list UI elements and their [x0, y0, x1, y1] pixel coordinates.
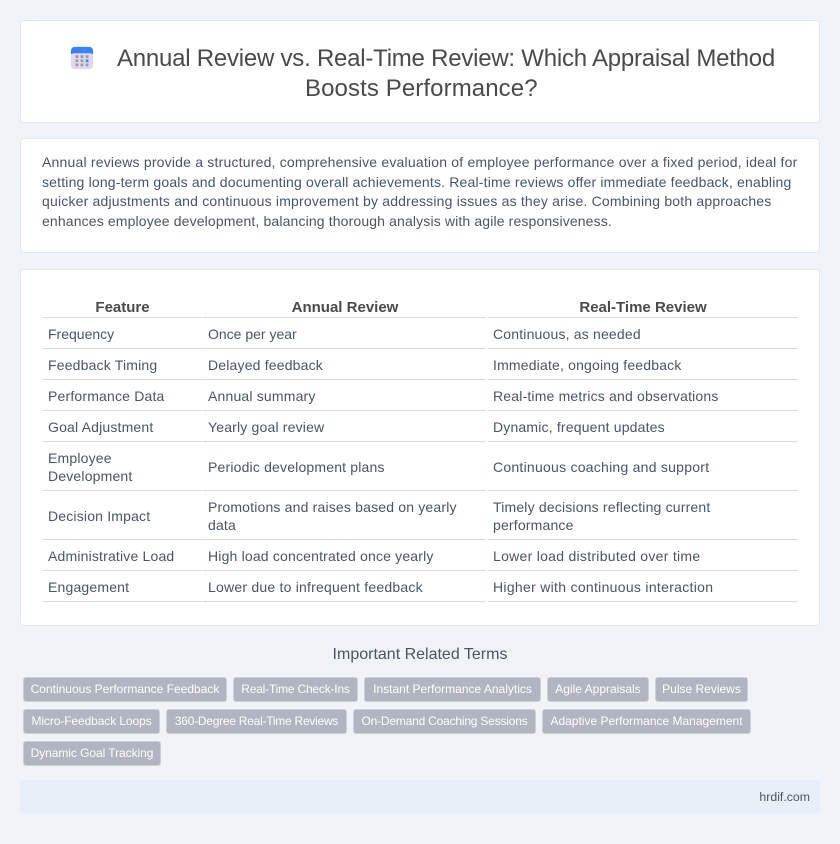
row: Administrative Load: High load concentrated once yearly — [208, 548, 434, 564]
intro paragraph: Annual reviews provide a structured, comprehensive evaluation of employee performance over a fixed period, ideal for — [42, 154, 798, 170]
row: Administrative Load: Lower load distributed over time — [493, 548, 700, 564]
table header: Real-Time Review — [579, 299, 707, 316]
tag: 360-Degree Real-Time Reviews — [175, 714, 338, 728]
row: Frequency: Once per year — [208, 326, 297, 342]
tag: Adaptive Performance Management — [550, 714, 743, 728]
tag — [353, 709, 536, 734]
tag: Real-Time Check-Ins — [241, 682, 350, 696]
tag — [23, 677, 227, 702]
row: Frequency: Frequency — [48, 326, 114, 342]
row: Decision Impact — [43, 499, 798, 540]
title — [117, 45, 775, 102]
row: Engagement: Higher with continuous interaction — [493, 579, 713, 595]
row: Performance Data: Annual summary — [208, 388, 316, 404]
intro paragraph: quicker adjustments and continuous improvement by addressing issues as they arise. Combining both approaches — [42, 193, 771, 209]
panel: related term tags — [23, 677, 751, 766]
tag — [166, 709, 347, 734]
intro paragraph: enhances employee development, balancing thorough analysis with agile responsiveness. — [42, 213, 612, 229]
row: Goal Adjustment: Goal Adjustment — [48, 419, 153, 435]
row: Performance Data: Performance Data — [48, 388, 164, 404]
panel: comparison table — [20, 269, 820, 626]
tag: Micro-Feedback Loops — [31, 714, 152, 728]
row: Feedback Timing: Immediate, ongoing feedback — [493, 357, 682, 373]
tag — [655, 677, 748, 702]
row: Frequency — [43, 326, 798, 349]
row: Employee Development: Periodic development plans — [208, 459, 385, 475]
row: Engagement: Engagement — [48, 579, 129, 595]
row: Decision Impact: Timely decisions reflecting current — [493, 499, 710, 515]
row: Performance Data: Real-time metrics and observations — [493, 388, 719, 404]
tag — [23, 709, 160, 734]
tag — [233, 677, 358, 702]
row: Employee Development — [43, 450, 798, 491]
row: Engagement: Lower due to infrequent feedback — [208, 579, 423, 595]
row: Administrative Load: Administrative Load — [48, 548, 174, 564]
title: Annual Review vs. Real-Time Review: Which Appraisal Method — [117, 45, 775, 72]
tag: Dynamic Goal Tracking — [31, 746, 153, 760]
tag: Agile Appraisals — [555, 682, 641, 696]
row: Decision Impact: data — [208, 517, 236, 533]
row: Goal Adjustment: Yearly goal review — [208, 419, 324, 435]
tag — [547, 677, 649, 702]
row: Feedback Timing: Feedback Timing — [48, 357, 157, 373]
tag: On-Demand Coaching Sessions — [361, 714, 528, 728]
row: Engagement — [43, 579, 798, 602]
heading: related terms: Important Related Terms — [333, 646, 507, 663]
row: Administrative Load — [43, 548, 798, 571]
footer source: hrdif.com — [759, 790, 810, 804]
row: Employee Development: Employee — [48, 450, 112, 466]
row: Decision Impact: Decision Impact — [48, 508, 150, 524]
icon: calendar — [70, 46, 94, 70]
row: Employee Development: Development — [48, 468, 132, 484]
tag — [23, 741, 161, 766]
tag — [542, 709, 751, 734]
panel: intro text — [20, 138, 820, 253]
tag: Pulse Reviews — [662, 682, 741, 696]
footer — [20, 780, 820, 814]
row: Performance Data — [43, 388, 798, 411]
row: Feedback Timing: Delayed feedback — [208, 357, 323, 373]
row: Decision Impact: performance — [493, 517, 574, 533]
intro paragraph: setting long-term goals and documenting overall achievements. Real-time reviews offer immediate feedback, enabling — [42, 174, 791, 190]
row: Goal Adjustment: Dynamic, frequent updates — [493, 419, 665, 435]
table header: Annual Review — [292, 299, 398, 316]
panel: title card — [20, 20, 820, 123]
row: Feedback Timing — [43, 357, 798, 380]
intro paragraph — [42, 154, 798, 229]
table header: Feature — [95, 299, 150, 316]
row: Frequency: Continuous, as needed — [493, 326, 641, 342]
tag — [364, 677, 541, 702]
title: Boosts Performance? — [305, 75, 538, 102]
row: Goal Adjustment — [43, 419, 798, 442]
row: Decision Impact: Promotions and raises based on yearly — [208, 499, 457, 515]
row: Employee Development: Continuous coaching and support — [493, 459, 709, 475]
tag: Continuous Performance Feedback — [31, 682, 219, 696]
table header — [43, 299, 798, 318]
tag: Instant Performance Analytics — [373, 682, 532, 696]
